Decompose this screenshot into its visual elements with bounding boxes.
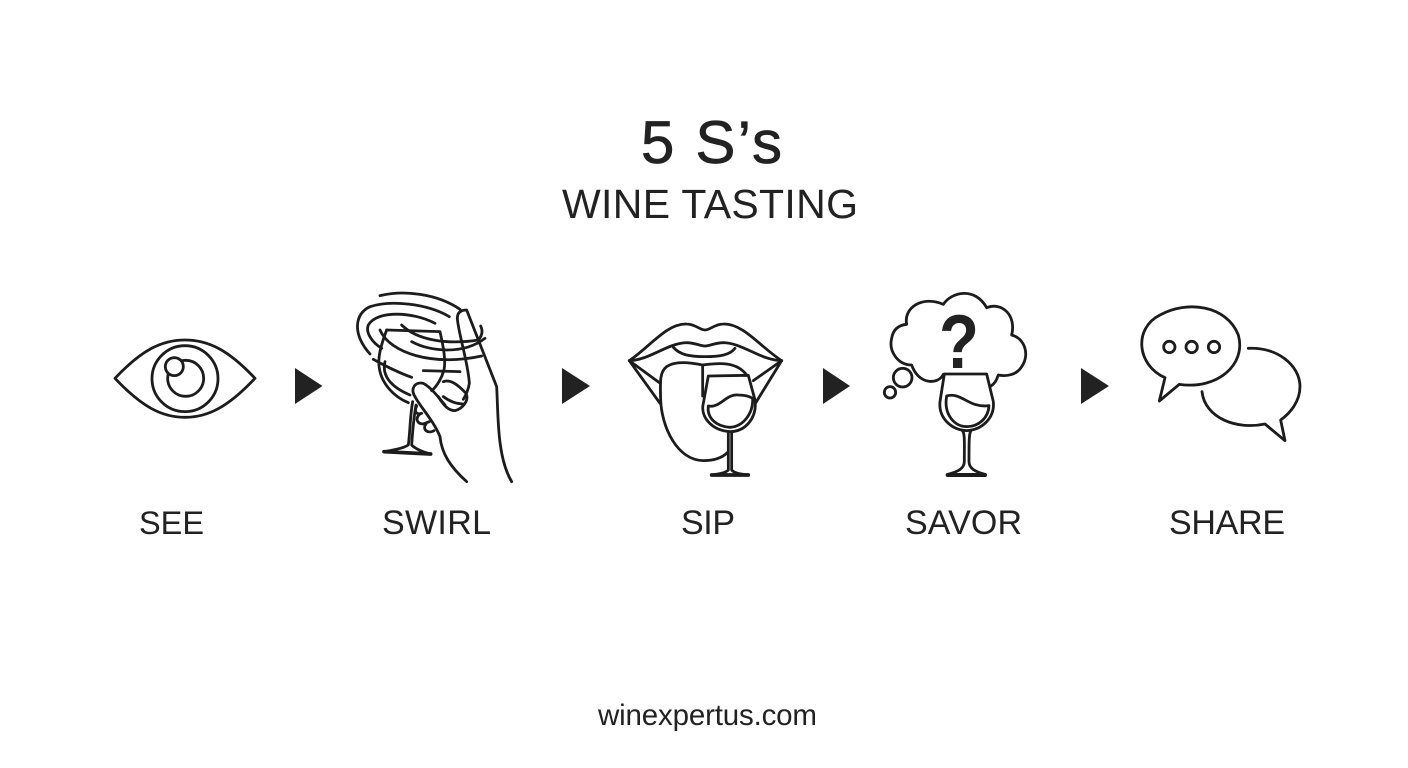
label: sip: SIP: [681, 504, 735, 542]
icon: mouth with tongue and glass: [629, 324, 782, 475]
label: share: SHARE: [1169, 504, 1285, 542]
icon: thought cloud with glass: [884, 293, 1026, 475]
icon: swirling glass in hand: [357, 293, 512, 482]
icon: speech bubbles: [1142, 307, 1300, 441]
arrow 3: [823, 368, 850, 404]
footer url: winexpertus.com: [597, 699, 817, 732]
title: 5 S’s: [641, 109, 782, 176]
label: savor: SAVOR: [905, 504, 1022, 542]
subtitle: WINE TASTING: [562, 181, 858, 227]
label: see: SEE: [139, 505, 204, 541]
arrow 2: [562, 368, 590, 404]
arrow 1: [295, 368, 322, 404]
label: swirl: SWIRL: [382, 504, 491, 542]
icon: eye: [115, 340, 255, 417]
arrow 4: [1081, 368, 1109, 404]
icon: question mark: ?: [939, 300, 979, 385]
